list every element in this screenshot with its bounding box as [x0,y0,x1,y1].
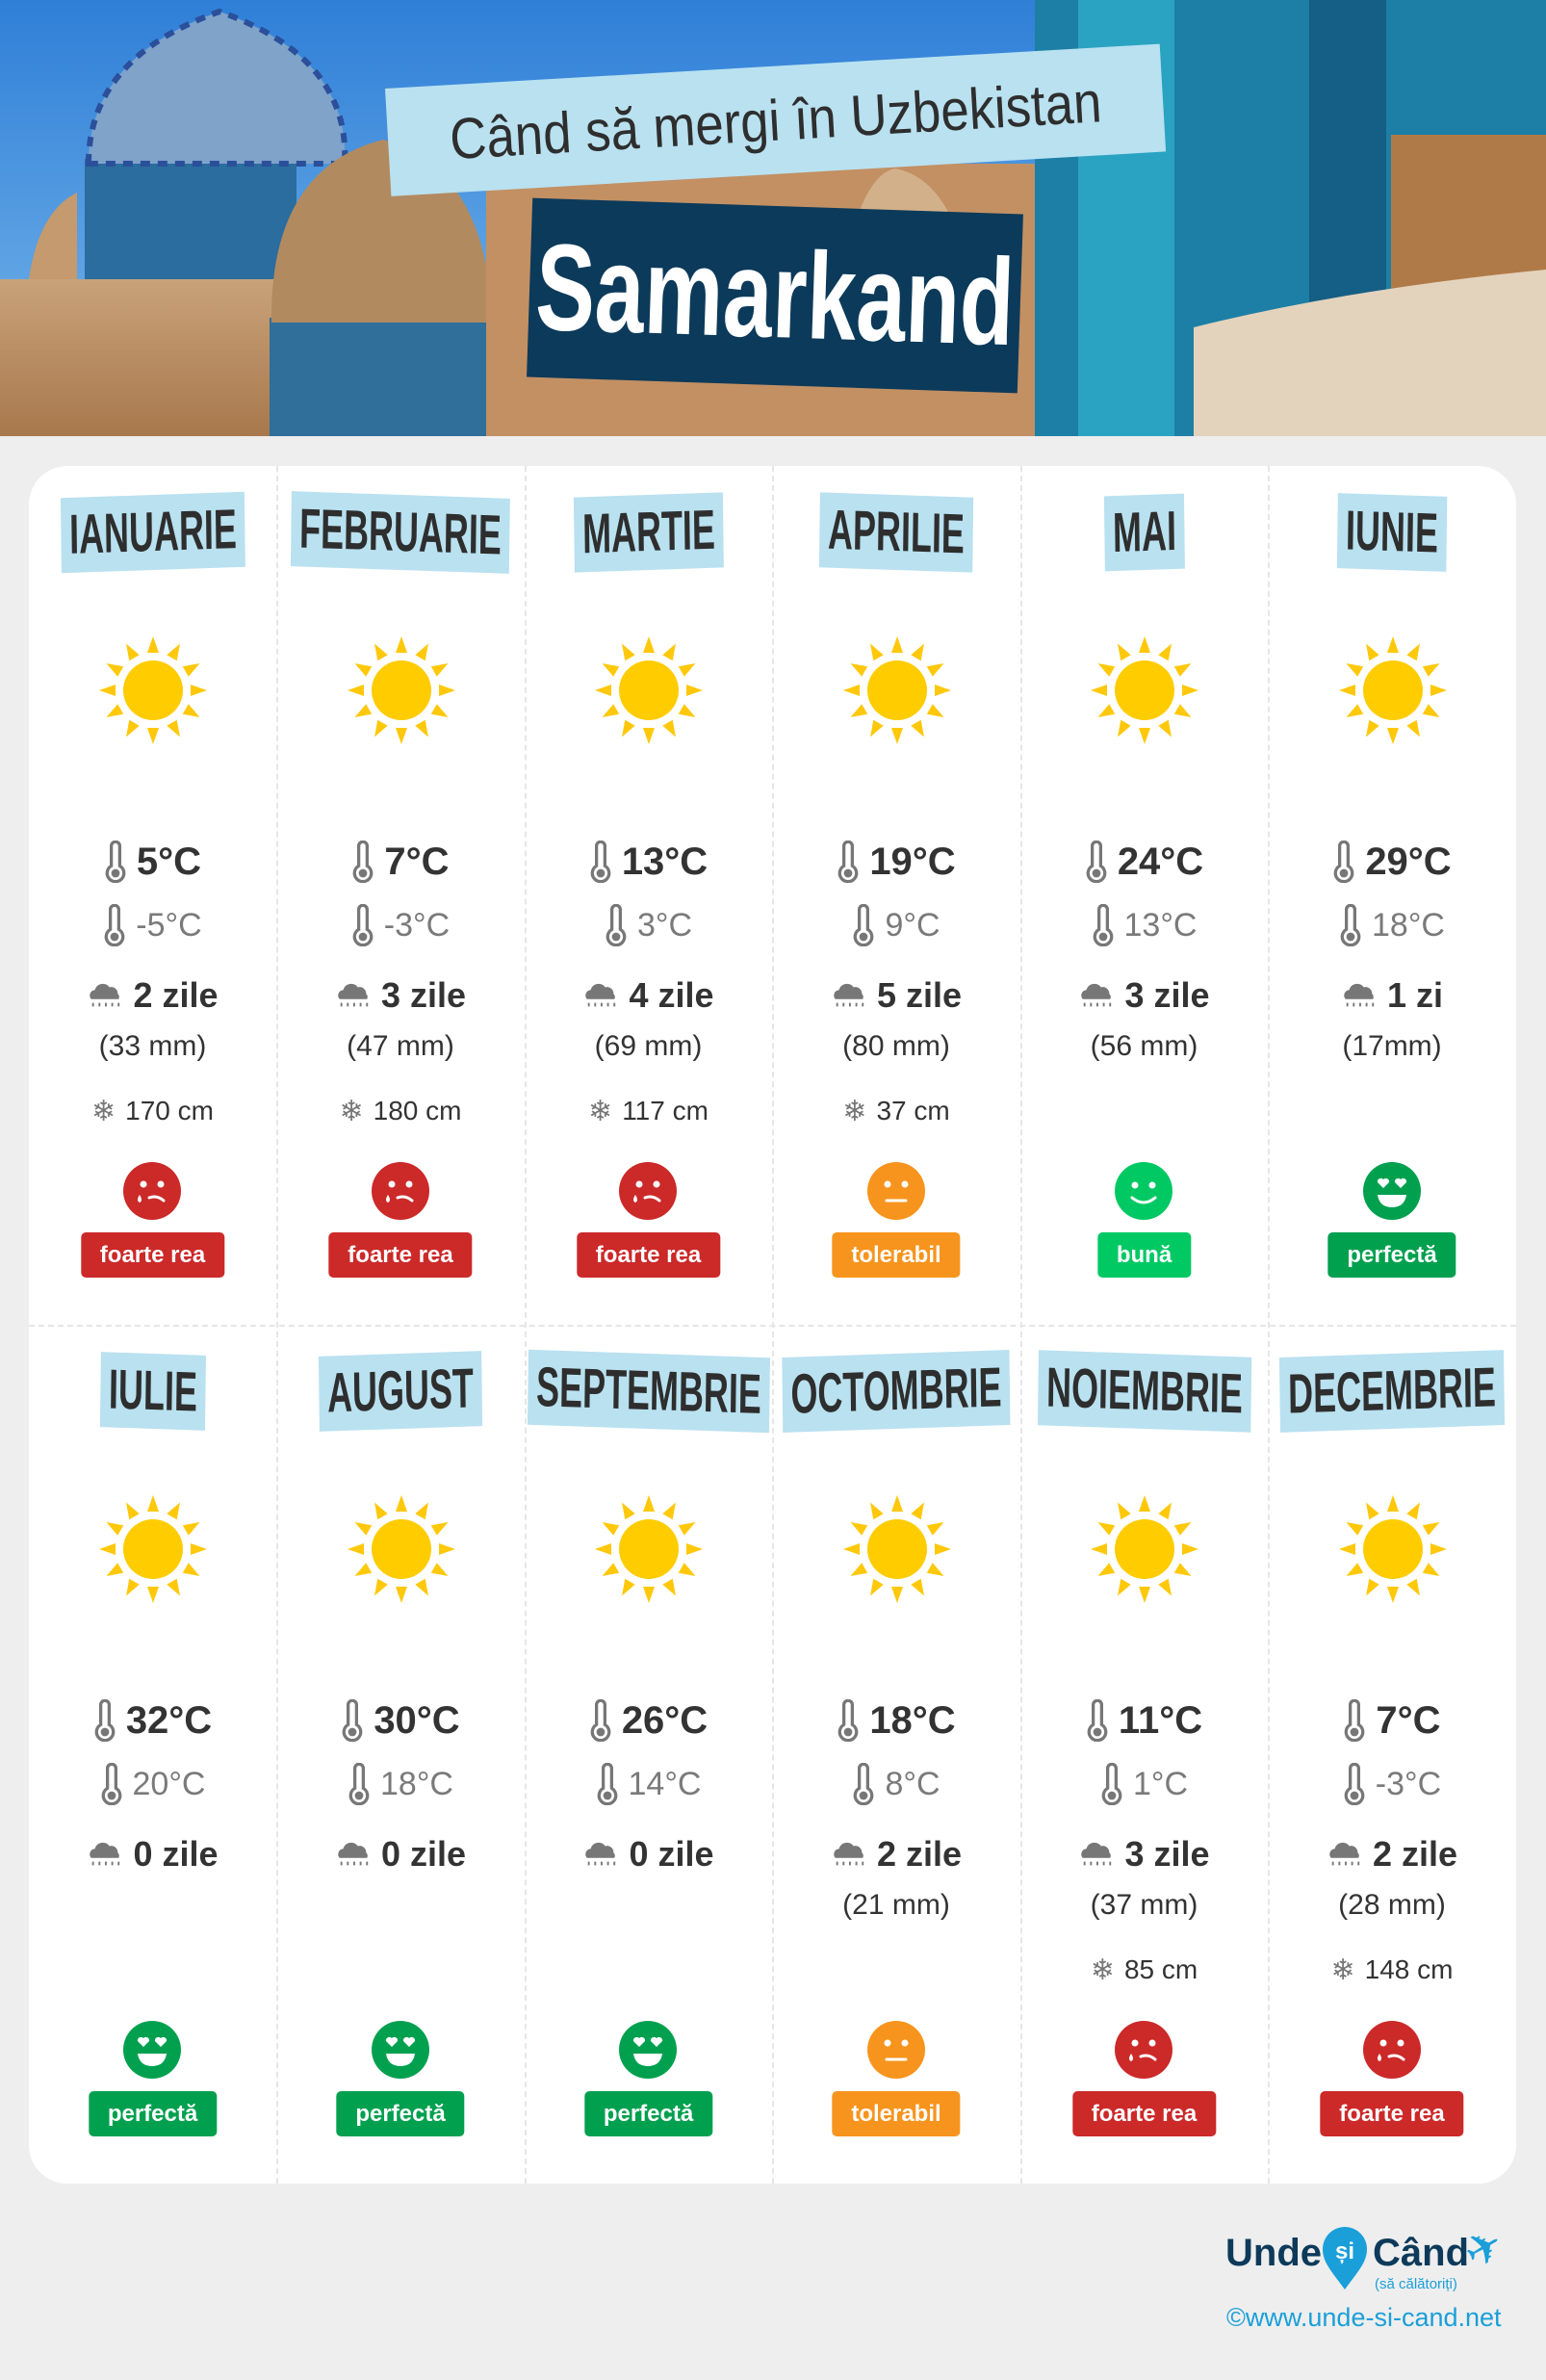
badge [832,1232,961,1278]
rain days [338,975,466,1015]
low temp: 14°C [629,1766,701,1802]
heading: IUNIE [1346,499,1438,565]
snow [340,1094,461,1128]
column: NOIEMBRIE [1020,1325,1268,2184]
badge: foarte rea [348,1242,453,1268]
snow [588,1094,709,1128]
low temp: 8°C [885,1766,940,1802]
rain mm: (37 mm) [1091,1889,1198,1921]
icon: sun [594,1494,704,1604]
rain days [772,1833,1020,1876]
snow: ❄ [842,1094,866,1128]
low temp [1020,1764,1268,1804]
rain days [90,975,219,1015]
icon: sad face [1363,2021,1421,2079]
logo: Unde și Când [1223,2222,1516,2295]
low temp: 3°C [637,907,692,944]
header photo [0,0,1546,436]
heading: FEBRUARIE [299,497,502,567]
column: MAI [1081,493,1210,1278]
icon: sun [1090,1494,1199,1604]
badge [1097,1232,1191,1278]
badge [1320,2091,1464,2136]
icon: sun [595,636,703,744]
badge [1072,2091,1216,2136]
rain days [585,975,714,1015]
logo tagline: (să călătoriți) [1375,2276,1457,2292]
snow: 117 cm [622,1096,709,1125]
snow: 85 cm [1124,1954,1198,1984]
high temp: 24°C [1118,840,1203,882]
snow: ❄ [588,1094,612,1128]
badge: perfectă [108,2101,197,2127]
rain days: 4 zile [629,975,714,1015]
badge: tolerabil [851,2101,941,2127]
rain mm: (69 mm) [595,1030,702,1062]
rain days: 0 zile [629,1834,714,1874]
icon: sun [841,1494,951,1604]
low temp: 13°C [1124,907,1197,944]
low temp [104,904,202,946]
snow [1020,1953,1268,1987]
rain days [1020,1833,1268,1876]
icon: happy face [1115,1162,1172,1220]
snow [91,1094,214,1128]
rain mm: (17mm) [1342,1030,1442,1062]
low temp: 1°C [1133,1766,1188,1802]
rain days: 0 zile [133,1834,219,1874]
title: Când să mergi în Uzbekistan: Când să mergi în Uzbekistan [448,69,1103,171]
title: Samarkand: Samarkand [533,219,1017,372]
column: APRILIE [818,492,974,1278]
high temp [29,1698,276,1743]
icon: sun [843,636,951,744]
heading: MAI [1112,500,1176,564]
low temp [606,904,692,946]
icon: neutral face [866,2021,924,2079]
badge: perfectă [1347,1242,1437,1268]
high temp: 11°C [1119,1698,1202,1741]
icon: plane: ✈ [1455,2216,1512,2280]
badge [328,1232,473,1278]
icon: map pin [1321,2226,1369,2291]
badge [1327,1232,1456,1278]
icon: sad face [619,1162,677,1220]
icon: sad face [1115,2021,1172,2079]
low temp: -3°C [1376,1766,1441,1802]
low temp [277,1764,524,1804]
icon: sun [98,1494,208,1604]
column: DECEMBRIE [1269,1325,1515,2184]
high temp: 7°C [384,840,450,882]
rain mm: (28 mm) [1338,1889,1446,1921]
low temp: -5°C [136,907,202,944]
high temp: 19°C [869,840,956,882]
rain days [525,1833,772,1876]
heading: OCTOMBRIE [790,1356,1002,1426]
high temp: 5°C [137,840,201,882]
rain days [834,975,962,1015]
rain mm: (21 mm) [842,1889,950,1921]
icon: neutral face [867,1162,925,1220]
icon: love face [619,2021,677,2079]
column: IULIE [29,1325,276,2184]
icon: sun [1339,636,1447,744]
high temp: 29°C [1365,840,1452,882]
low temp: 18°C [1372,907,1445,944]
low temp [1340,904,1445,946]
heading: IULIE [108,1358,197,1424]
rain mm: (80 mm) [842,1030,950,1062]
low temp: 20°C [133,1766,205,1802]
heading: MARTIE [581,499,715,565]
snow: ❄ [1331,1953,1355,1987]
high temp [106,840,201,883]
column: OCTOMBRIE [772,1325,1020,2184]
rain days [277,1833,524,1876]
rain days: 2 zile [877,1834,962,1874]
high temp: 18°C [869,1698,956,1741]
icon: sun [1338,1494,1448,1604]
rain days [1344,975,1443,1015]
low temp: 9°C [885,907,940,944]
rain days: 3 zile [1124,975,1210,1015]
heading: APRILIE [828,499,965,565]
high temp [277,1698,524,1743]
heading: IANUARIE [68,498,237,566]
high temp: 30°C [374,1698,460,1741]
rain days: 0 zile [381,1834,466,1874]
heading: AUGUST [327,1357,474,1425]
badge: perfectă [604,2101,693,2127]
heading [1103,494,1185,571]
footer url: ©www.unde-si-cand.net [1226,2303,1502,2332]
icon: map pin: și [1335,2238,1354,2264]
snow: 37 cm [876,1096,950,1125]
rain days: 2 zile [1373,1834,1457,1874]
badge [832,2091,961,2136]
icon: sad face [123,1162,181,1220]
rain days: 1 zi [1387,975,1443,1015]
rain days [1269,1833,1515,1876]
badge [577,1232,720,1278]
column: IUNIE [1327,493,1456,1278]
icon: sun [99,636,207,744]
snow: ❄ [91,1094,116,1128]
logo text: Când: Când [1373,2232,1469,2274]
badge: foarte rea [100,1242,205,1268]
badge: tolerabil [851,1242,941,1268]
low temp [29,1764,276,1804]
high temp [525,1698,772,1743]
rain days: 2 zile [133,975,219,1015]
snow: 180 cm [374,1096,461,1125]
badge [89,2091,217,2136]
snow: ❄ [1091,1953,1115,1987]
high temp: 26°C [622,1698,708,1741]
high temp: 13°C [622,840,708,882]
badge [336,2091,465,2136]
low temp [1269,1764,1515,1804]
column: SEPTEMBRIE [525,1325,772,2184]
icon: sun [348,636,455,744]
logo text: Unde: Unde [1225,2232,1322,2274]
heading: NOIEMBRIE [1045,1357,1243,1425]
panel: months card [29,466,1516,2184]
rain mm: (33 mm) [99,1030,206,1062]
badge: foarte rea [1339,2101,1445,2127]
rain days: 3 zile [381,975,466,1015]
high temp: 7°C [1376,1698,1441,1741]
rain mm: (56 mm) [1091,1030,1198,1062]
high temp [1020,1698,1268,1743]
low temp [352,904,450,946]
column: MARTIE [574,492,724,1278]
icon: love face [123,2021,181,2079]
low temp [1094,904,1197,946]
snow: 148 cm [1365,1954,1453,1984]
low temp [772,1764,1020,1804]
snow: 170 cm [125,1096,214,1125]
low temp [525,1764,772,1804]
heading: SEPTEMBRIE [535,1356,761,1426]
badge [584,2091,712,2136]
high temp: 32°C [126,1698,212,1741]
rain days: 3 zile [1124,1834,1210,1874]
low temp: -3°C [384,907,450,944]
high temp [772,1698,1020,1743]
low temp [853,904,940,946]
rain mm: (47 mm) [347,1030,454,1062]
badge: foarte rea [596,1242,701,1268]
rain days: 5 zile [877,975,962,1015]
high temp [352,840,450,883]
badge [81,1232,224,1278]
high temp [1269,1698,1515,1743]
low temp: 18°C [380,1766,453,1802]
snow: ❄ [340,1094,364,1128]
badge: perfectă [355,2101,446,2127]
rain days [29,1833,276,1876]
icon: sun [347,1494,456,1604]
column: FEBRUARIE [291,491,510,1278]
snow [842,1094,950,1128]
title: Când să mergi în Uzbekistan [385,44,1166,196]
icon: sun [1091,636,1198,744]
badge: bună [1117,1242,1172,1268]
icon: sad face [372,1162,429,1220]
icon: love face [372,2021,429,2079]
rain days [1081,975,1210,1015]
icon: love face [1363,1162,1421,1220]
heading: DECEMBRIE [1288,1356,1496,1426]
column: IANUARIE [60,491,245,1278]
column: AUGUST [277,1325,524,2184]
snow [1269,1953,1515,1987]
badge: foarte rea [1092,2101,1197,2127]
